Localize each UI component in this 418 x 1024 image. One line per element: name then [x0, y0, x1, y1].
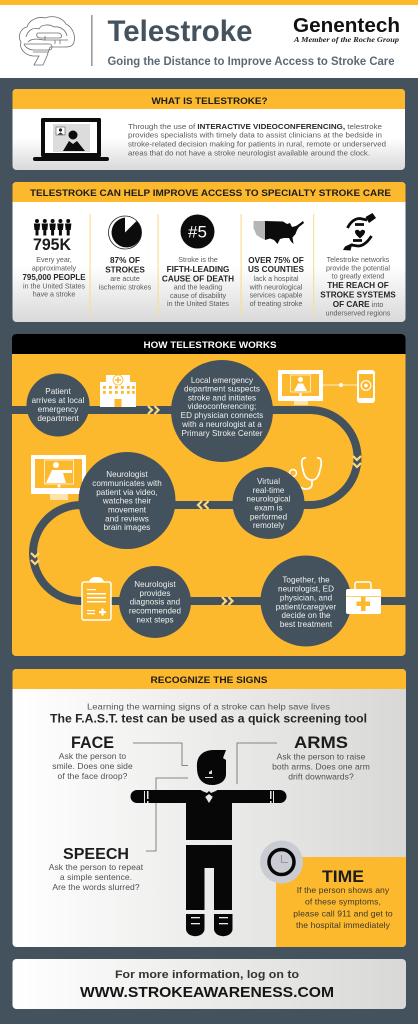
stat: #5 — [162, 214, 234, 308]
stat: 795K: have a stroke — [33, 290, 75, 298]
sign: arms: both arms. Does one arm — [272, 762, 370, 772]
step: neurologist communicates: brain images — [104, 523, 150, 532]
stat: 75% counties — [248, 221, 305, 308]
icon: pie chart — [108, 216, 142, 249]
icon: number five badge: #5 — [188, 222, 207, 242]
stat: 795K: Every year, — [36, 256, 72, 264]
step: together decide: physician, and — [280, 594, 332, 602]
stat: 75% counties: OVER 75% OF — [248, 256, 304, 265]
step: neurologist communicates: watches their — [102, 496, 151, 506]
stat: 75% counties: US COUNTIES — [248, 265, 305, 274]
step: neurologist communicates — [78, 452, 176, 549]
step: local ED initiates videoconferencing: stroke and initiates — [188, 394, 256, 402]
sign: speech: SPEECH — [63, 846, 129, 863]
heading: RECOGNIZE THE SIGNS — [150, 675, 268, 685]
header band — [0, 0, 418, 78]
stat: 75% counties: with neurological — [249, 284, 303, 292]
step: local ED initiates videoconferencing: department suspects — [184, 384, 260, 394]
stat: reach of stroke systems: provide the potential — [326, 264, 390, 272]
step: virtual exam — [232, 467, 304, 539]
flow chevrons — [31, 406, 361, 605]
icon: hands with heart — [343, 213, 376, 250]
title: Telestroke — [108, 15, 252, 48]
icon: laptop video call — [33, 118, 109, 161]
logo: Genentech: A Member of the Roche Group — [293, 35, 399, 44]
text block: Through the use of INTERACTIVE VIDEOCONFERENCING, telestroke — [128, 123, 382, 131]
step: local ED initiates videoconferencing: Local emergency — [191, 376, 254, 385]
sign: time: TIME — [322, 868, 364, 886]
sign: speech: a simple sentence. — [60, 872, 132, 882]
step: together decide — [260, 556, 352, 646]
sign: face: smile. Does one side — [52, 761, 133, 771]
step: local ED initiates videoconferencing: with a neurologist at a — [181, 420, 262, 429]
subheading: The F.A.S.T. test can be used as a quick screening tool — [50, 712, 367, 726]
sign: arms — [272, 733, 370, 782]
step: neurologist communicates: and reviews — [105, 514, 149, 524]
stat: reach of stroke systems: Telestroke networks — [327, 256, 390, 264]
stat: 795K: in the United States — [23, 282, 85, 290]
step: virtual exam: real-time — [253, 486, 285, 495]
step: patient arrives: department — [37, 414, 79, 423]
step: together decide: decide on the — [281, 611, 331, 620]
sign: arms: Ask the person to raise — [277, 752, 366, 762]
sign: speech: Ask the person to repeat — [49, 862, 144, 872]
text block: areas that do not have a stroke neurologist available around the clock. — [128, 150, 370, 158]
step: virtual exam: neurological — [246, 494, 291, 504]
sign: arms: ARMS — [294, 733, 348, 752]
sign: time — [260, 840, 406, 947]
stat: 795K: 795K — [33, 236, 71, 254]
step: neurologist diagnosis — [119, 566, 191, 638]
step: neurologist diagnosis: provides — [140, 589, 170, 598]
panel: what is telestroke — [12, 89, 405, 170]
step: neurologist communicates: movement — [108, 506, 147, 514]
step: neurologist communicates: communicates with — [92, 479, 162, 488]
sign: time: please call 911 and get to — [293, 908, 393, 918]
sign: time: of these symptoms, — [305, 896, 381, 906]
sign: face: of the face droop? — [58, 771, 128, 781]
stat: reach of stroke systems: STROKE SYSTEMS — [320, 290, 396, 300]
heading: WHAT IS TELESTROKE? — [152, 96, 268, 106]
stat: #5: cause of disability — [170, 292, 226, 300]
text block: provides specialists with timely data to assist clinicians at the bedside in — [128, 132, 382, 140]
step: patient arrives: Patient — [45, 387, 71, 396]
step: virtual exam: Virtual — [257, 477, 280, 486]
text block: stroke-related decision making for patients in rural, remote or underserved — [128, 140, 386, 148]
panel: recognize the signs — [12, 669, 406, 947]
panel: how telestroke works — [12, 334, 406, 656]
stat: #5: Stroke is the — [178, 256, 218, 264]
panel: access to specialty stroke care — [12, 182, 406, 322]
step: patient arrives: emergency — [38, 405, 79, 414]
stat: 795K: 795,000 PEOPLE — [22, 273, 86, 282]
step: together decide: best treatment — [280, 620, 333, 629]
step: together decide: neurologist, ED — [278, 584, 334, 594]
pointer lines — [133, 743, 277, 851]
icon: monitor and phone — [278, 370, 375, 405]
stat: 75% counties: lack a hospital — [254, 275, 299, 283]
step: virtual exam: performed — [250, 512, 287, 522]
step: together decide: Together, the — [282, 576, 330, 584]
step: neurologist diagnosis: next steps — [136, 616, 174, 624]
stat: #5: CAUSE OF DEATH — [162, 274, 234, 284]
sign: arms: drift downwards? — [288, 772, 354, 782]
step: local ED initiates videoconferencing: ED physician connects — [181, 411, 263, 420]
stat: #5: FIFTH-LEADING — [167, 265, 229, 274]
stat: reach of stroke systems: underserved regions — [326, 310, 391, 318]
stat: 795K — [22, 219, 86, 298]
step: neurologist diagnosis: diagnosis and — [130, 598, 180, 606]
icon: first aid kit — [346, 582, 381, 614]
step: virtual exam: remotely — [253, 521, 285, 530]
icon: clipboard — [82, 577, 111, 620]
stat: 87%: ischemic strokes — [99, 284, 152, 292]
panel: footer call to action: For more information, log on to — [115, 969, 299, 981]
stat: 75% counties: services capable — [250, 292, 302, 300]
stat: 75% counties: of treating stroke — [250, 300, 302, 308]
step: local ED initiates videoconferencing — [171, 360, 273, 462]
stat: reach of stroke systems: OF CARE into — [333, 300, 383, 309]
icon: hospital — [100, 375, 136, 407]
stat: 87% — [99, 216, 152, 292]
icon: clock — [260, 840, 303, 884]
flow path — [12, 410, 406, 601]
icon: five people — [34, 219, 71, 236]
stat: 87%: 87% OF — [110, 256, 140, 265]
stat: #5: and the leading — [174, 284, 222, 292]
text block — [128, 123, 386, 158]
icon: stethoscope — [290, 458, 321, 489]
step: local ED initiates videoconferencing: videoconferencing; — [188, 402, 256, 411]
step: together decide: patient/caregiver — [276, 602, 337, 612]
sign: speech — [49, 846, 144, 892]
step: neurologist diagnosis: recommended — [129, 606, 181, 616]
stat: reach of stroke systems: to greatly extend — [332, 272, 384, 280]
panel: footer call to action — [12, 959, 406, 1009]
heading: TELESTROKE CAN HELP IMPROVE ACCESS TO SPECIALTY STROKE CARE — [30, 188, 391, 199]
stat: #5: in the United States — [167, 300, 229, 308]
stat: 795K: approximately — [32, 264, 77, 272]
sign: time: If the person shows any — [297, 885, 390, 895]
sign: time: the hospital immediately — [296, 920, 391, 930]
icon: monitor neurologist — [31, 455, 86, 500]
stat: reach of stroke systems: THE REACH OF — [327, 281, 389, 290]
sign: speech: Are the words slurred? — [52, 882, 140, 892]
sign: face — [52, 733, 133, 781]
stat: 87%: are acute — [110, 275, 140, 283]
subtitle: Going the Distance to Improve Access to Stroke Care — [108, 56, 394, 68]
sign: face: Ask the person to — [59, 751, 126, 761]
step: patient arrives: arrives at local — [32, 396, 85, 405]
step: neurologist communicates: Neurologist — [106, 470, 148, 479]
stat: 87%: STROKES — [105, 266, 145, 274]
step: local ED initiates videoconferencing: Primary Stroke Center — [182, 429, 263, 438]
step: neurologist communicates: patient via video, — [96, 488, 158, 497]
icon: US map — [254, 221, 304, 244]
panel: footer call to action: WWW.STROKEAWARENESS.COM — [80, 984, 334, 1001]
step: virtual exam: exam is — [254, 504, 283, 512]
figure: person — [130, 750, 286, 936]
step: neurologist diagnosis: Neurologist — [134, 580, 176, 589]
icon: brain — [19, 17, 75, 65]
sign: face: FACE — [71, 733, 114, 752]
stat: reach of stroke systems — [320, 213, 396, 318]
heading: HOW TELESTROKE WORKS — [144, 340, 276, 350]
logo: Genentech: Genentech — [293, 15, 400, 37]
intro text: Learning the warning signs of a stroke can help save lives — [87, 702, 330, 712]
step: patient arrives — [26, 374, 90, 436]
